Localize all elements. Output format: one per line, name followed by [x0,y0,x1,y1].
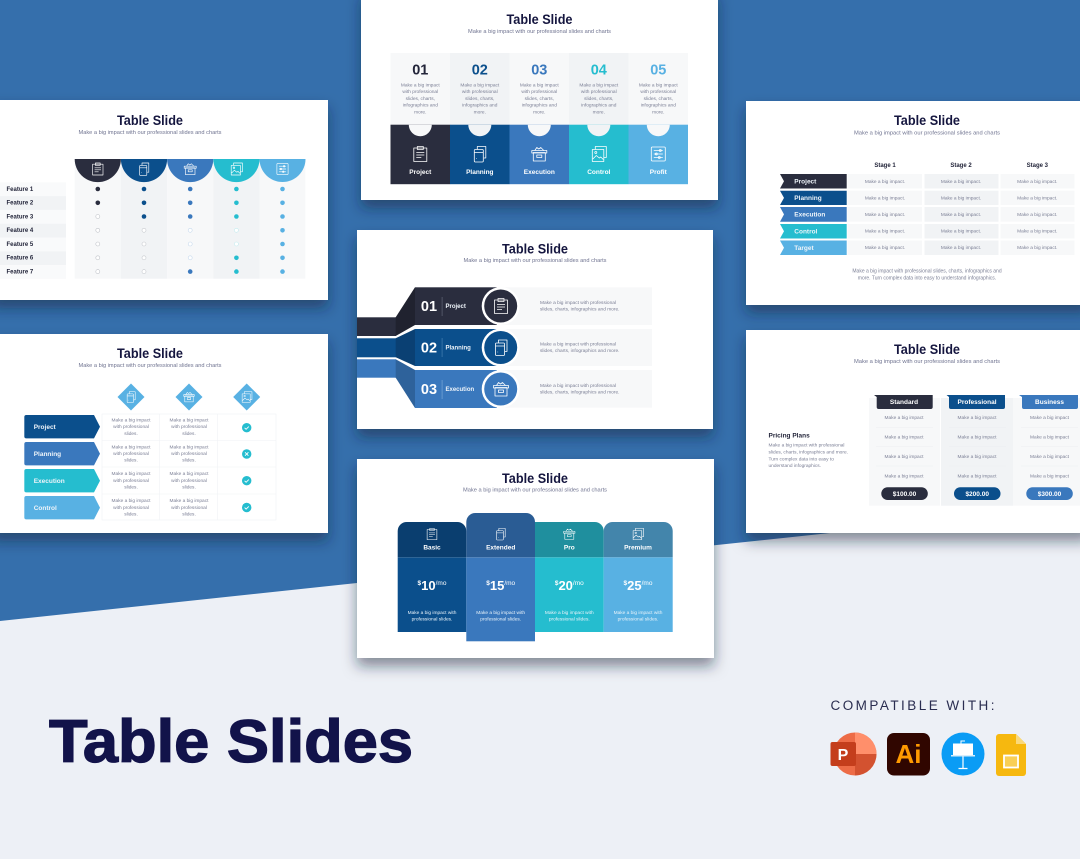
table cells: Make a big impact. [865,228,905,234]
ribbon 2: planning: Planning [446,346,471,352]
heading: Table Slide [894,113,960,128]
card: pro: /mo [573,580,584,587]
card: pro: professional slides. [549,616,590,622]
ribbon 3: execution: 03 [421,382,437,398]
slide: ribbon rows table [357,230,713,429]
plan rows: Make a big impact [885,454,924,460]
column numbers: 02 [472,62,488,78]
background: light lower area [0,507,1080,859]
card: basic: $ [418,580,422,587]
column descriptions: more. [652,109,664,115]
table cells: Make a big impact. [865,179,905,185]
row descriptions: slides, charts, infographics and more. [540,390,619,396]
column descriptions: slides, charts, [465,96,494,102]
table cell text: Make a big impact [112,498,151,504]
column descriptions: slides, charts, [584,96,613,102]
column descriptions [401,82,678,115]
plan rows: Make a big impact [885,474,924,480]
plan rows: Make a big impact [885,415,924,421]
feature row labels [0,182,66,279]
plan rows: Make a big impact [885,434,924,440]
subheading: Make a big impact with our professional slides and charts [463,488,608,494]
column descriptions: more. [533,109,545,115]
table cell text: slides. [124,512,138,518]
heading: Table Slide [502,242,568,256]
card: premium: Make a big impact with [614,610,663,616]
slide: pricing plans table [746,330,1080,533]
column footers with icons and labels: Control [587,169,611,176]
table cells [848,174,1074,255]
subheading: Make a big impact with our professional slides and charts [78,130,222,136]
table cell text: slides. [124,484,138,490]
footnote: Make a big impact with professional slides, charts, infographics and [852,268,1002,274]
column descriptions: slides, charts, [644,96,673,102]
card: extended: Make a big impact with [476,610,525,616]
subheading: Make a big impact with our professional slides and charts [78,363,222,369]
heading: Table Slide [117,113,183,128]
column footers with icons and labels: Planning [466,169,494,176]
icon: PowerPoint [830,732,876,776]
card: extended: 15 [490,578,504,593]
plan rows: Make a big impact [958,454,997,460]
plan header: professional: Professional [957,399,997,406]
column numbers: 05 [650,62,666,78]
card: extended: professional slides. [480,616,521,622]
notched row labels: Target [794,245,815,252]
pricing plans intro: understand infographics. [768,463,821,469]
feature row labels: Feature 5 [6,242,34,248]
plan rows: Make a big impact [1030,474,1070,480]
table grid [102,414,276,520]
column numbers: 04 [591,62,607,78]
diamond icons [118,384,260,410]
ribbon 3: execution: Execution [446,387,475,393]
feature row labels: Feature 1 [6,187,34,193]
slide: stages table [746,101,1080,305]
column descriptions: infographics and [522,102,557,108]
table cell text: Make a big impact [170,498,209,504]
card: premium: 25 [627,578,642,593]
table cell text: Make a big impact [170,444,209,450]
table cell text: slides. [182,512,196,518]
column numbers: 01 [412,62,428,78]
ribbon 1: project: 01 [421,299,437,315]
table cell text: slides. [182,458,196,464]
column descriptions: with professional [581,89,617,95]
plan header: business: Business [1035,399,1064,406]
table cells: Make a big impact. [941,228,981,234]
table cell text: slides. [182,484,196,490]
card: extended [466,513,535,641]
column descriptions: Make a big impact [520,82,559,88]
plan header: standard [874,395,933,409]
pricing plans intro: Turn complex data into easy to [768,456,834,462]
ribbon 3: execution [357,359,520,408]
ribbon 2: planning: 02 [421,340,437,356]
table cell text [112,418,209,518]
main title: Table Slides [49,708,413,775]
plan rows: Make a big impact [958,415,997,421]
table cell text: with professional [171,451,207,457]
row descriptions: Make a big impact with professional [540,342,616,348]
table cells: Make a big impact. [1017,195,1057,201]
column descriptions: slides, charts, [525,96,554,102]
card: basic: 10 [421,578,436,593]
plan rows [876,415,1078,480]
notched row labels: Planning [794,195,822,202]
card: pro: Make a big impact with [545,610,594,616]
slide: arrow labels comparison table [0,334,328,533]
pricing plans intro: slides, charts, infographics and more. [768,450,848,456]
plan rows: Make a big impact [958,434,997,440]
slide: feature matrix table [0,100,328,300]
card: basic: Basic [423,544,441,552]
plan columns [869,398,1080,506]
price pills: $200.00 [965,491,989,498]
column descriptions: with professional [402,89,438,95]
row descriptions: slides, charts, infographics and more. [540,307,619,313]
table cells: Make a big impact. [941,179,981,185]
table cell text: with professional [171,478,207,484]
stage headers: Stage 2 [950,163,972,169]
card: extended: $ [486,580,490,587]
table cell text: Make a big impact [112,471,151,477]
card: premium [604,522,673,632]
feature row labels: Feature 3 [6,214,34,220]
plan header: standard: Standard [890,399,918,406]
table cells: Make a big impact. [941,212,981,218]
column descriptions: Make a big impact [460,82,500,88]
plan rows: Make a big impact [1030,454,1070,460]
subheading: Make a big impact with our professional slides and charts [854,359,1001,365]
icon: Keynote [942,732,984,776]
table cell text: Make a big impact [170,471,209,477]
table cell text: Make a big impact [170,418,209,424]
ribbon 1: project: Project [446,304,466,310]
table cell text: slides. [182,431,196,437]
card: premium: /mo [642,580,653,587]
card: pro: Pro [564,544,575,552]
pricing plans intro: Make a big impact with professional [768,442,844,448]
table cells: Make a big impact. [865,195,905,201]
column descriptions: Make a big impact [579,82,619,88]
table cell text: Make a big impact [112,418,151,424]
subheading: Make a big impact with our professional slides and charts [464,258,607,264]
stage headers: Stage 1 [874,163,896,169]
table cell text: with professional [113,451,149,457]
column descriptions: more. [593,109,605,115]
column footers with icons and labels [390,125,688,184]
heading: Table Slide [117,346,183,361]
plan rows: Make a big impact [958,474,997,480]
row descriptions: Make a big impact with professional [540,383,616,389]
heading: Table Slide [502,471,568,486]
stage headers [874,163,1049,169]
notched row labels: Control [794,228,818,235]
column numbers [412,62,666,78]
card: pro: $ [555,580,559,587]
card: basic: Make a big impact with [408,610,457,616]
card: premium: professional slides. [618,616,658,622]
notched row labels: Project [794,178,817,186]
table cell text: slides. [124,458,138,464]
notched row labels [780,174,847,255]
row arrow labels [24,415,100,519]
column descriptions: infographics and [462,102,498,108]
table cells: Make a big impact. [1017,179,1057,185]
matrix columns [75,159,305,279]
row arrow labels: Control [34,505,57,512]
table cells: Make a big impact. [865,212,905,218]
table cells: Make a big impact. [1017,228,1057,234]
row descriptions: Make a big impact with professional [540,300,616,306]
card: premium: $ [624,580,628,587]
card: basic: professional slides. [412,616,452,622]
heading: Table Slide [894,342,960,357]
table cell text: with professional [113,505,149,511]
feature row labels: Feature 7 [6,270,34,276]
table cells: Make a big impact. [1017,212,1057,218]
row arrow labels: Project [34,424,57,431]
column descriptions: more. [474,109,486,115]
ribbon 1: project [357,287,520,336]
table cells: Make a big impact. [941,245,981,251]
column numbers: 03 [531,62,547,78]
column footers with icons and labels: Project [409,169,432,176]
icon: Illustrator [887,733,930,776]
pricing plans intro: Pricing Plans [768,432,810,440]
column descriptions: with professional [462,89,498,95]
feature row labels: Feature 4 [6,228,34,234]
subheading: Make a big impact with our professional slides and charts [468,29,612,35]
heading: Table Slide [506,12,573,27]
notched row labels: Execution [794,212,825,218]
table cell text: with professional [171,505,207,511]
card: premium: Premium [624,544,652,552]
plan header: professional [946,395,1005,409]
column descriptions: slides, charts, [406,96,435,102]
icon: Illustrator: Ai [896,739,922,769]
card: basic: /mo [436,580,447,587]
card: pro [535,522,604,632]
compatible with label: COMPATIBLE WITH: [830,698,994,713]
column footers with icons and labels: Execution [524,169,555,176]
column descriptions: with professional [640,89,676,95]
card: pro: 20 [558,578,573,593]
table cell text: with professional [113,478,149,484]
card: basic [398,522,466,632]
status icons [242,423,251,512]
icon: PowerPoint: P [838,747,849,764]
ribbon 2: planning [357,328,520,366]
column descriptions: infographics and [403,102,438,108]
slide: numbered columns table [361,0,718,200]
feature row labels: Feature 6 [6,256,34,262]
column backgrounds [390,53,688,125]
icon: Google Slides [996,734,1026,776]
table cell text: Make a big impact [112,444,151,450]
plan header: business [1019,395,1078,409]
semicircle column headers [75,159,306,182]
card: extended: Extended [486,544,515,552]
column descriptions: Make a big impact [401,82,440,88]
row arrow labels: Planning [34,451,61,458]
column descriptions: Make a big impact [639,82,678,88]
row arrow labels: Execution [34,478,65,485]
table cell text: slides. [124,431,138,437]
row descriptions: slides, charts, infographics and more. [540,348,619,354]
slide: pricing cards [357,459,714,658]
card: extended: /mo [504,580,516,587]
table cells: Make a big impact. [865,245,905,251]
column descriptions: with professional [521,89,557,95]
row panels [498,287,652,408]
subheading: Make a big impact with our professional slides and charts [854,130,1001,136]
column descriptions: infographics and [641,102,676,108]
plan rows: Make a big impact [1030,434,1070,440]
column descriptions: infographics and [581,102,617,108]
table cells: Make a big impact. [1017,245,1057,251]
feature row labels: Feature 2 [6,200,34,206]
footnote: more. Turn complex data into easy to understand infographics. [858,276,996,282]
table cell text: with professional [113,424,149,430]
price pills: $100.00 [893,491,917,498]
plan rows: Make a big impact [1030,415,1070,421]
matrix dots [96,187,285,274]
table cells: Make a big impact. [941,195,981,201]
table cell text: with professional [171,424,207,430]
pricing plans intro [768,432,848,469]
stage headers: Stage 3 [1027,163,1049,169]
price pills: $300.00 [1038,491,1062,498]
price pills [881,487,1073,500]
row descriptions [540,300,619,396]
column descriptions: more. [414,109,426,115]
column footers with icons and labels: Profit [650,169,668,176]
footnote [852,268,1002,282]
